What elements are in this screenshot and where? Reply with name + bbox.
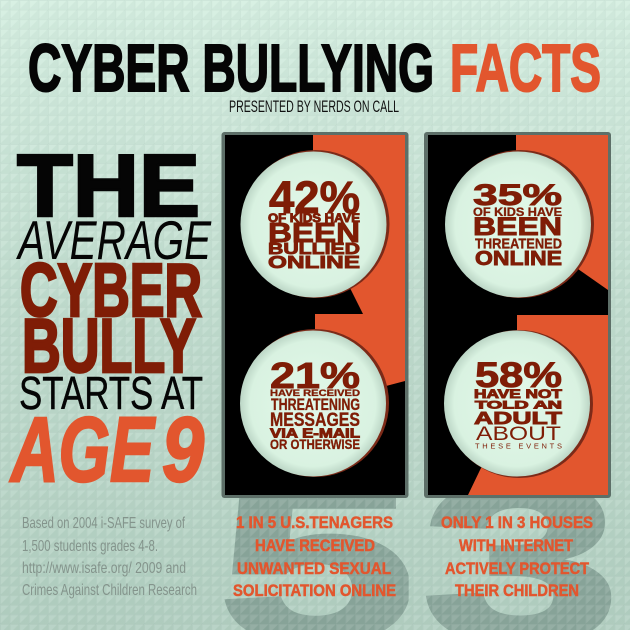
panel: left statistics [222, 132, 408, 498]
fact: 1 in 5 teenagers [233, 514, 396, 600]
headline: the average cyber bully starts at age 9: STARTS AT [19, 367, 203, 419]
stat circle: 35%: OF KIDS HAVE [473, 206, 562, 219]
source note: Crimes Against Children Research [22, 582, 197, 599]
stat circle: 35% [445, 150, 594, 298]
fact: 1 in 3 houses: ONLY 1 IN 3 HOUSES [441, 514, 593, 532]
stat circle: 21%: OR OTHERWISE [270, 436, 360, 452]
stat circle: 21%: THREATENING [271, 395, 360, 414]
fact: 1 in 3 houses: ACTIVELY PROTECT [445, 560, 589, 578]
source note: Based on 2004 i-SAFE survey of [22, 515, 185, 532]
stat circle: 58%: ADULT [474, 408, 562, 428]
fact: 1 in 5 teenagers: UNWANTED SEXUAL [237, 560, 391, 578]
stat circle: 42%: BULLIED [268, 241, 360, 258]
panel: right statistics [424, 132, 611, 498]
fact: 1 in 3 houses: THEIR CHILDREN [455, 582, 579, 600]
headline: the average cyber bully starts at age 9 [10, 136, 212, 501]
stat circle: 42%: BEEN [268, 217, 360, 248]
headline: the average cyber bully starts at age 9: CYBER [20, 248, 202, 332]
fact: 1 in 3 houses [441, 514, 593, 600]
headline: the average cyber bully starts at age 9: 9 [162, 399, 204, 501]
stat circle: 21% [240, 329, 389, 477]
stat circle: 35%: THREATENED [475, 236, 562, 252]
source note [22, 515, 197, 599]
orange background shape [313, 135, 405, 386]
fact: 1 in 5 teenagers: HAVE RECEIVED [255, 537, 375, 555]
stat circle: 58%: THESE EVENTS [475, 442, 562, 450]
headline: the average cyber bully starts at age 9: AGE [10, 399, 156, 501]
stat circle: 58%: ABOUT [476, 424, 562, 445]
source note: 1,500 students grades 4-8. [22, 538, 158, 555]
orange background shape, upper [516, 135, 608, 290]
stat circle: 21%: VIA E-MAIL [270, 426, 360, 440]
stat circle: 42%: 42% [269, 172, 360, 223]
fact: 1 in 3 houses: WITH INTERNET [459, 537, 573, 555]
stat circle: 58%: HAVE NOT [474, 387, 563, 401]
stat circle: 42% [240, 150, 390, 298]
source note: http://www.isafe.org/ 2009 and [22, 560, 186, 577]
orange background shape, lower [468, 315, 608, 495]
headline: the average cyber bully starts at age 9: AVERAGE [16, 209, 212, 271]
headline: the average cyber bully starts at age 9: BULLY [22, 304, 196, 389]
stat circle: 42%: OF KIDS HAVE [268, 212, 360, 225]
fact: 1 in 5 teenagers: 1 IN 5 U.S.TENAGERS [236, 514, 393, 532]
stat circle: 58%: TOLD AN [475, 400, 562, 412]
stat circle: 21%: MESSAGES [270, 410, 360, 431]
stat circle: 35%: 35% [473, 179, 562, 212]
stat circle: 58% [444, 330, 593, 478]
stat circle: 21%: HAVE RECEIVED [270, 388, 361, 398]
stat circle: 35%: ONLINE [475, 248, 562, 270]
title: CYBER BULLYING [28, 31, 434, 106]
stat circle: 58%: 58% [475, 356, 562, 395]
fact: 1 in 5 teenagers: SOLICITATION ONLINE [233, 582, 396, 600]
stat circle: 21%: 21% [270, 355, 360, 396]
stat circle: 35%: BEEN [473, 213, 562, 241]
subtitle: PRESENTED BY NERDS ON CALL [229, 98, 399, 116]
headline: the average cyber bully starts at age 9: THE [17, 136, 200, 235]
stat circle: 42%: ONLINE [268, 252, 360, 272]
